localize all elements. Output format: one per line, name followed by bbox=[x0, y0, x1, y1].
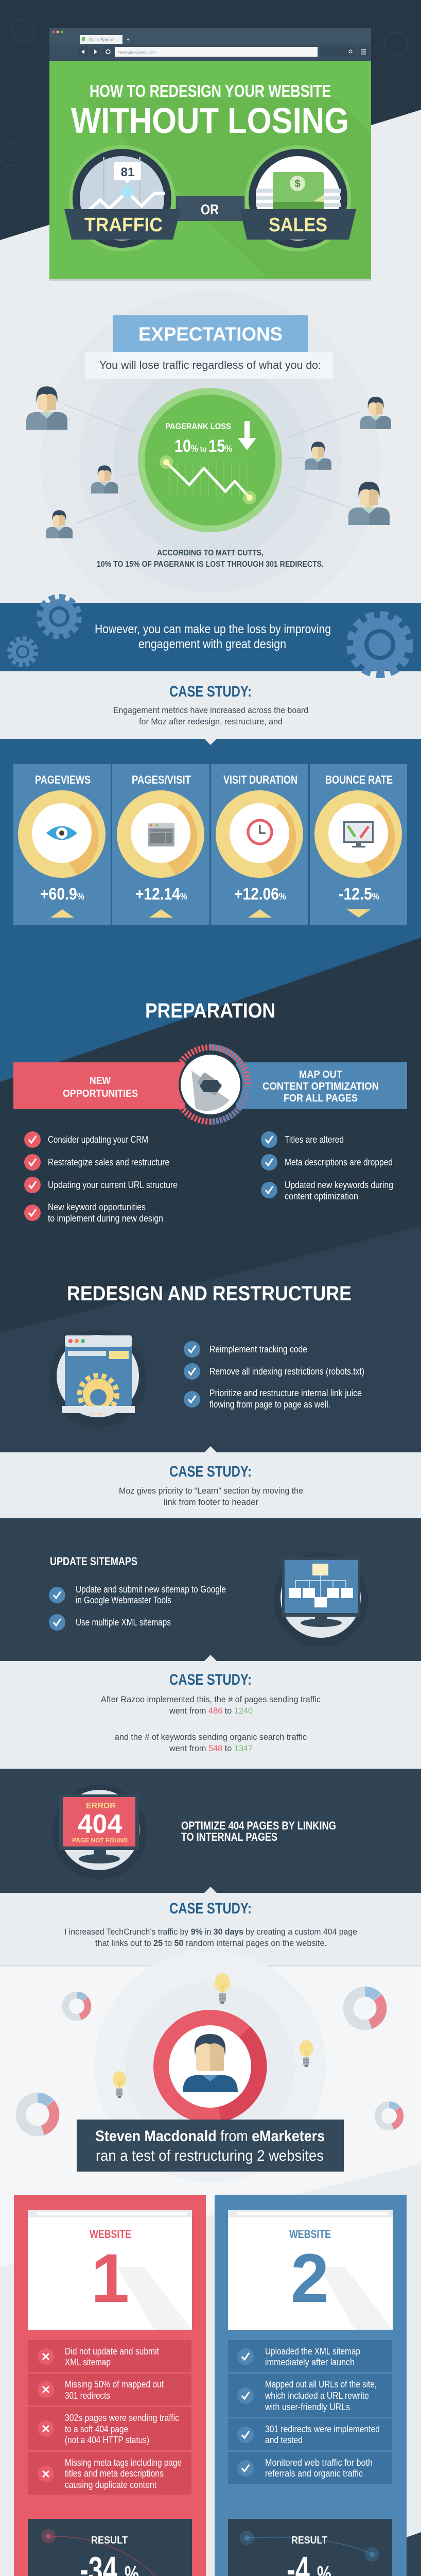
banner: make up the loss: However, you can make up the loss by improving bbox=[95, 622, 331, 636]
checklist: update sitemaps: Update and submit new sitemap to Google bbox=[76, 1584, 226, 1595]
checklist: new opportunities: Restrategize sales and restructure bbox=[48, 1157, 169, 1167]
panel: bounce rate: -12.5% bbox=[339, 885, 379, 903]
panel: website 2: Uploaded the XML sitemap bbox=[265, 2346, 360, 2357]
panel: website 1: Did not update and submit bbox=[65, 2346, 159, 2357]
chart: pagerank loss bbox=[138, 388, 282, 532]
heading: expectations: You will lose traffic regardless of what you do: bbox=[99, 359, 321, 371]
panel: website 1: 301 redirects bbox=[65, 2391, 110, 2401]
panel: pages per visit: +12.14% bbox=[135, 885, 187, 903]
panel: website 2: 301 redirects were implemented bbox=[265, 2424, 380, 2434]
chart: pagerank loss: 10% to 15% bbox=[174, 436, 232, 456]
panel: website 2: which included a URL rewrite bbox=[265, 2391, 369, 2401]
title: WITHOUT LOSING bbox=[71, 100, 349, 141]
checklist: update sitemaps: Use multiple XML sitemaps bbox=[76, 1617, 171, 1628]
panel: website 1: WEBSITE bbox=[90, 2228, 131, 2241]
panel: website 2: WEBSITE bbox=[289, 2228, 331, 2241]
checklist: new opportunities: Consider updating your CRM bbox=[48, 1134, 148, 1145]
panel: bounce rate: BOUNCE RATE bbox=[325, 773, 393, 786]
panel: website 2: and tested bbox=[265, 2435, 303, 2445]
checklist: content optimization: content optimization bbox=[285, 1191, 358, 1201]
heading: expectations bbox=[85, 315, 334, 379]
text: matt cutts quote: ACCORDING TO MATT CUTTS, bbox=[157, 549, 264, 557]
case study: moz engagement: CASE STUDY: bbox=[169, 683, 252, 700]
case study: razoo: went from 486 to 1240 bbox=[169, 1706, 253, 1716]
decorative bulbs and donuts bbox=[14, 1973, 405, 2138]
ribbon: traffic or sales: TRAFFIC bbox=[84, 214, 163, 236]
panel: website 2: with user-friendly URLs bbox=[265, 2402, 350, 2412]
checklist: content optimization: Titles are altered bbox=[285, 1134, 344, 1145]
heading: redesign and restructure: REDESIGN AND RESTRUCTURE bbox=[67, 1282, 352, 1305]
checklist: update sitemaps: in Google Webmaster Tools bbox=[76, 1595, 171, 1605]
icon: sales circle bbox=[245, 145, 351, 251]
case study: moz learn: CASE STUDY: bbox=[169, 1463, 252, 1480]
panel: pages per visit bbox=[112, 764, 209, 925]
checklist: content optimization: Meta descriptions are dropped bbox=[285, 1157, 393, 1167]
case study: razoo: went from 548 to 1347 bbox=[169, 1743, 253, 1753]
panel: website 2: immediately after launch bbox=[265, 2357, 355, 2367]
panel: website 2: Mapped out all URLs of the site, bbox=[265, 2379, 377, 2389]
ribbon: traffic or sales bbox=[64, 196, 356, 240]
panel: website 1: titles and meta descriptions bbox=[65, 2468, 164, 2479]
checklist: redesign: Reimplement tracking code bbox=[209, 1344, 307, 1354]
icon: browser settings bbox=[49, 1330, 147, 1428]
text: optimize 404 pages: OPTIMIZE 404 PAGES BY LINKING bbox=[181, 1819, 336, 1832]
panel: website 1: causing duplicate content bbox=[65, 2480, 156, 2490]
browser window header bbox=[49, 28, 371, 281]
title: HOW TO REDESIGN YOUR WEBSITE bbox=[90, 81, 331, 100]
case study: razoo bbox=[101, 1671, 321, 1753]
panel: pageviews bbox=[13, 764, 111, 925]
case study: techcrunch: I increased TechCrunch’s traffic by 9% in 30 days by creating a custom 404 page bbox=[64, 1927, 357, 1937]
case study: moz engagement bbox=[113, 683, 308, 726]
panel: website 1: 1 bbox=[91, 2240, 129, 2317]
banner: make up the loss bbox=[9, 597, 410, 674]
case study: moz learn: Moz gives priority to “Learn” section by moving the bbox=[119, 1486, 303, 1496]
icon: traffic circle: 81 bbox=[121, 165, 134, 179]
panel: visit duration: VISIT DURATION bbox=[223, 773, 297, 786]
panel: website 1: to a soft 404 page bbox=[65, 2424, 128, 2434]
panel: website 1: Missing meta tags including page bbox=[65, 2458, 182, 2468]
icon: traffic circle bbox=[69, 145, 175, 251]
panel: website 2: 2 bbox=[291, 2240, 329, 2317]
case study: techcrunch bbox=[64, 1900, 357, 1948]
panel: visit duration bbox=[211, 764, 308, 925]
case study: razoo: After Razoo implemented this, the # of pages sending traffic bbox=[101, 1694, 321, 1704]
text: matt cutts quote: 10% TO 15% OF PAGERANK IS LOST THROUGH 301 REDIRECTS. bbox=[97, 560, 324, 569]
browser window header: Quick Sprout bbox=[89, 38, 113, 42]
checklist: update sitemaps: UPDATE SITEMAPS bbox=[50, 1555, 137, 1568]
panel: website 1: 302s pages were sending traffic bbox=[65, 2413, 179, 2423]
text: matt cutts quote bbox=[97, 549, 324, 569]
case study: moz learn bbox=[119, 1463, 303, 1507]
panel: website 1: Missing 50% of mapped out bbox=[65, 2379, 164, 2389]
ribbon: preparation split: MAP OUT bbox=[299, 1069, 342, 1080]
ribbon: preparation split: NEW bbox=[90, 1075, 111, 1087]
checklist: new opportunities: New keyword opportunities bbox=[48, 1202, 146, 1212]
checklist: update sitemaps bbox=[49, 1555, 226, 1631]
result: website 2 bbox=[228, 2519, 392, 2576]
panel: pageviews: PAGEVIEWS bbox=[35, 773, 91, 786]
browser window header: www.quicksprout.com bbox=[118, 50, 156, 55]
checklist: new opportunities bbox=[24, 1131, 178, 1224]
case study: moz engagement: Engagement metrics have increased across the board bbox=[113, 705, 308, 715]
callout: steven macdonald: Steven Macdonald from eMarketers bbox=[95, 2128, 325, 2145]
icon: error 404 monitor: 404 bbox=[78, 1809, 122, 1839]
result: website 1 bbox=[28, 2519, 192, 2576]
icon: error 404 monitor: PAGE NOT FOUND bbox=[72, 1837, 128, 1844]
checklist: redesign: Remove all indexing restrictions (robots.txt) bbox=[209, 1366, 364, 1377]
case study: razoo: CASE STUDY: bbox=[169, 1671, 252, 1688]
panel: bounce rate bbox=[310, 764, 407, 925]
icon: person in red ring bbox=[153, 2010, 267, 2123]
heading: preparation: PREPARATION bbox=[145, 999, 275, 1022]
checklist: new opportunities: Updating your current URL structure bbox=[48, 1180, 178, 1190]
case study: razoo: and the # of keywords sending organic search traffic bbox=[115, 1732, 307, 1742]
panel: website 2: referrals and organic traffic bbox=[265, 2468, 363, 2479]
callout: steven macdonald: ran a test of restructuring 2 websites bbox=[96, 2147, 324, 2164]
text: optimize 404 pages: TO INTERNAL PAGES bbox=[181, 1831, 277, 1843]
panel: website 1: (not a 404 HTTP status) bbox=[65, 2435, 149, 2445]
ribbon: preparation split: OPPORTUNITIES bbox=[63, 1088, 138, 1099]
checklist: redesign: Prioritize and restructure internal link juice bbox=[209, 1388, 362, 1398]
checklist: content optimization: Updated new keywords during bbox=[285, 1180, 393, 1190]
ribbon: traffic or sales: SALES bbox=[269, 214, 327, 236]
panel: website 1: XML sitemap bbox=[65, 2357, 111, 2367]
case study: techcrunch: CASE STUDY: bbox=[169, 1900, 252, 1917]
panel: pages per visit: PAGES/VISIT bbox=[132, 773, 191, 786]
title bbox=[71, 81, 349, 141]
case study: moz engagement: for Moz after redesign, restructure, and bbox=[139, 717, 283, 726]
panel: website 1 bbox=[14, 2195, 206, 2576]
result: website 1: RESULT bbox=[91, 2535, 128, 2546]
case study: moz learn: link from footer to header bbox=[164, 1497, 258, 1507]
icon: error 404 monitor: ERROR bbox=[86, 1802, 116, 1810]
result: website 2: RESULT bbox=[291, 2535, 327, 2546]
ribbon: preparation split: CONTENT OPTIMIZATION bbox=[262, 1081, 379, 1092]
panel: website 2 bbox=[215, 2195, 407, 2576]
icon: sales circle: $ bbox=[294, 178, 301, 190]
callout: steven macdonald bbox=[77, 2120, 344, 2172]
checklist: redesign: flowing from page to page as well. bbox=[209, 1399, 330, 1410]
checklist: redesign bbox=[184, 1341, 364, 1410]
ribbon: preparation split bbox=[13, 1047, 407, 1122]
checklist: content optimization bbox=[261, 1131, 393, 1201]
icon: error 404 monitor bbox=[52, 1785, 147, 1879]
case study: techcrunch: that links out to 25 to 50 random internal pages on the website. bbox=[95, 1938, 327, 1948]
ribbon: preparation split: FOR ALL PAGES bbox=[284, 1093, 358, 1104]
people network bbox=[26, 386, 391, 538]
banner: make up the loss: engagement with great design bbox=[138, 637, 286, 651]
checklist: new opportunities: to implement during new design bbox=[48, 1213, 163, 1224]
text: optimize 404 pages bbox=[181, 1819, 336, 1843]
icon: sitemap monitor bbox=[273, 1552, 368, 1647]
panel: pageviews: +60.9% bbox=[40, 885, 84, 903]
panel: visit duration: +12.06% bbox=[234, 885, 286, 903]
panel: website 2: Monitored web traffic for both bbox=[265, 2458, 373, 2468]
browser window header: + bbox=[127, 37, 130, 43]
chart: pagerank loss: PAGERANK LOSS bbox=[165, 421, 231, 431]
ribbon: traffic or sales: OR bbox=[201, 201, 219, 217]
heading: expectations: EXPECTATIONS bbox=[138, 324, 283, 345]
